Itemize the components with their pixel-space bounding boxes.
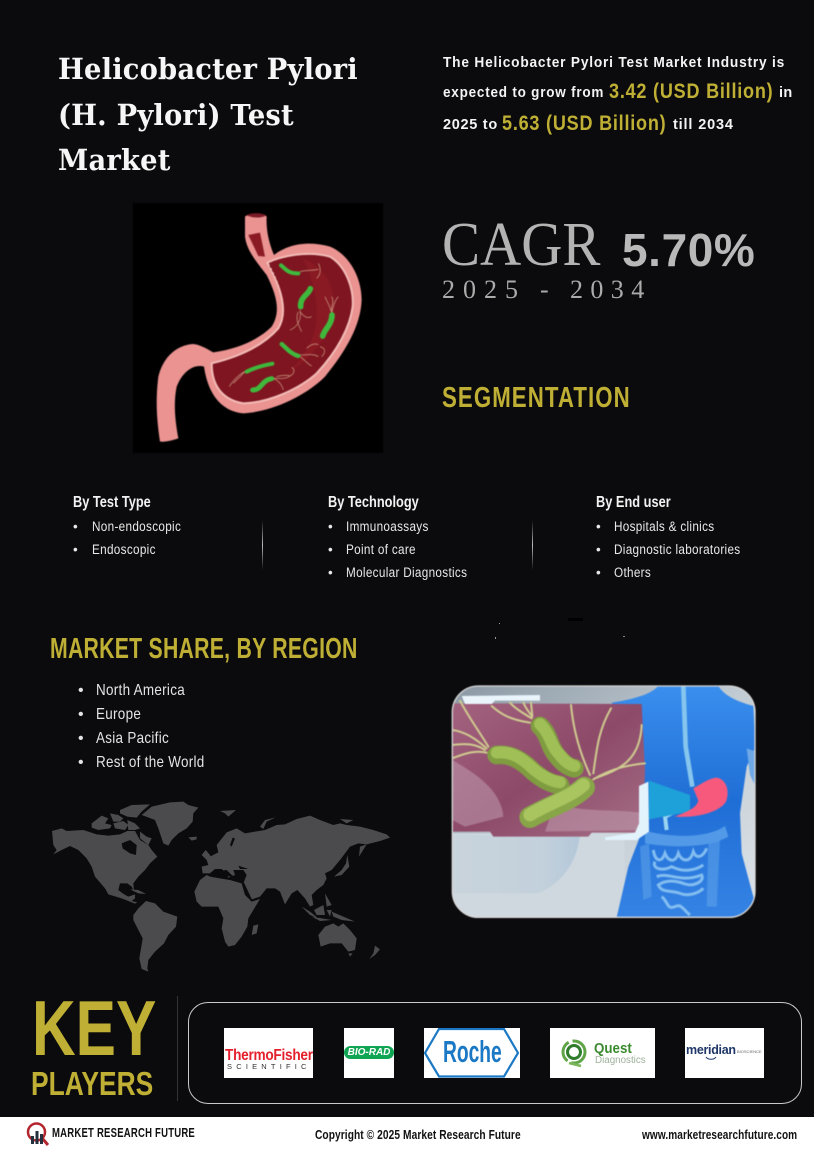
segment: by technology: Immunoassays [346, 519, 429, 534]
logo: Thermo Fisher Scientific: ThermoFisher [225, 1047, 313, 1064]
japan and sakhalin [334, 844, 367, 877]
logo: Roche [424, 1028, 520, 1078]
CAGR period: - [540, 275, 549, 304]
logo: Bio-Rad [344, 1028, 394, 1078]
key players heading: PLAYERS [31, 1064, 153, 1102]
segment: by test type: • [73, 519, 78, 534]
stomach outer wall and duodenum [157, 214, 362, 442]
CAGR period: 2025 [442, 275, 526, 304]
cyan connector [649, 781, 690, 819]
key players heading: KEY [32, 984, 156, 1072]
segmentation heading: SEGMENTATION [442, 382, 631, 414]
logo: Meridian Bioscience: meridian [686, 1043, 736, 1057]
north america [52, 828, 157, 904]
caribbean [130, 889, 146, 894]
CAGR period: 2034 [570, 275, 652, 304]
iceland [188, 837, 197, 841]
region list: Asia Pacific [96, 730, 169, 747]
market growth statement: 2025 to [443, 117, 498, 133]
segment: by test type: Endoscopic [92, 542, 156, 557]
scalloped mucosa [214, 256, 350, 401]
segment: by end user: Others [614, 565, 651, 580]
region list: • [78, 706, 84, 723]
market growth statement: 3.42 (USD Billion) [609, 80, 773, 103]
hudson bay [122, 840, 137, 855]
logo: Thermo Fisher Scientific [224, 1028, 313, 1078]
market share heading: MARKET SHARE, BY REGION [50, 633, 358, 665]
CAGR value: CAGR [442, 211, 600, 279]
CAGR value [442, 211, 755, 279]
segment: by end user [596, 494, 740, 580]
CAGR value: 5.70% [622, 224, 755, 276]
illustration: H. pylori bacteria and human torso [450, 684, 756, 919]
flagella [452, 701, 645, 779]
region list: Rest of the World [96, 754, 205, 771]
segment: by end user: Hospitals & clinics [614, 519, 714, 534]
pink stomach [675, 778, 728, 817]
bacteria panel [452, 703, 645, 837]
segment: by test type: Non-endoscopic [92, 519, 181, 534]
market growth statement: The Helicobacter Pylori Test Market Industry is [443, 55, 785, 71]
footer copyright: Copyright © 2025 Market Research Future [315, 1127, 521, 1142]
logo: Thermo Fisher Scientific: SCIENTIFIC [227, 1062, 311, 1071]
market growth statement [443, 55, 792, 135]
segment: by test type: By Test Type [73, 494, 151, 511]
bacteria bodies [247, 265, 332, 390]
stomach inner lining [212, 254, 353, 403]
arctic islands [92, 804, 152, 845]
northern islands [220, 810, 353, 829]
region list: North America [96, 682, 185, 699]
region list [78, 682, 205, 771]
segment: by technology [328, 494, 467, 580]
black sea and mediterranean [210, 866, 248, 878]
segment: by technology: Molecular Diagnostics [346, 565, 467, 580]
illustration: stomach with H. pylori bacteria [134, 204, 382, 452]
title: Market [58, 143, 171, 177]
logo: Roche: Roche [443, 1034, 502, 1069]
britain [202, 850, 212, 860]
footer logo icon [26, 1122, 49, 1146]
greenland [142, 802, 198, 846]
logo: Bio-Rad: BIO-RAD [348, 1047, 390, 1058]
segment: by technology: • [328, 519, 333, 534]
madagascar [252, 924, 258, 935]
footer band [0, 1117, 814, 1150]
market growth statement: till 2034 [673, 117, 734, 133]
intestines [653, 848, 707, 915]
market growth statement: in [779, 85, 792, 101]
south america [133, 901, 177, 972]
CAGR period [442, 275, 652, 304]
segment: by end user: By End user [596, 494, 671, 511]
market growth statement: expected to grow from [443, 85, 604, 101]
asian islands [302, 893, 355, 922]
region list: • [78, 682, 84, 699]
australia [318, 923, 357, 957]
region list: • [78, 730, 84, 747]
footer website: www.marketresearchfuture.com [642, 1127, 797, 1142]
bacteria bodies [497, 724, 584, 817]
region list: • [78, 754, 84, 771]
segment: by test type [73, 494, 181, 557]
logo: Meridian Bioscience [685, 1028, 764, 1078]
bacteria flagella [229, 263, 338, 390]
segment: by end user: • [596, 565, 601, 580]
region list: Europe [96, 706, 141, 723]
title: (H. Pylori) Test [58, 98, 294, 132]
segment: by end user: • [596, 542, 601, 557]
logo: Quest Diagnostics: Quest [594, 1041, 632, 1057]
logo: Meridian Bioscience: BIOSCIENCE [737, 1049, 762, 1054]
segment: by test type: • [73, 542, 78, 557]
blue torso [612, 686, 756, 917]
title [58, 52, 358, 177]
world map [52, 802, 390, 972]
logo: Quest Diagnostics: Diagnostics [595, 1055, 646, 1066]
eurasia [202, 816, 390, 907]
segment: by technology: By Technology [328, 494, 419, 511]
new zealand [369, 946, 380, 959]
key players panel [188, 1002, 802, 1104]
segment: by technology: • [328, 542, 333, 557]
title: Helicobacter Pylori [58, 52, 358, 86]
footer brand: MARKET RESEARCH FUTURE [52, 1125, 195, 1140]
segment: by technology: Point of care [346, 542, 416, 557]
segment: by technology: • [328, 565, 333, 580]
logo: Quest Diagnostics [550, 1028, 655, 1078]
segment: by end user: • [596, 519, 601, 534]
africa [194, 875, 260, 947]
market growth statement: 5.63 (USD Billion) [502, 112, 666, 135]
esophagus [683, 686, 692, 787]
segment: by end user: Diagnostic laboratories [614, 542, 740, 557]
